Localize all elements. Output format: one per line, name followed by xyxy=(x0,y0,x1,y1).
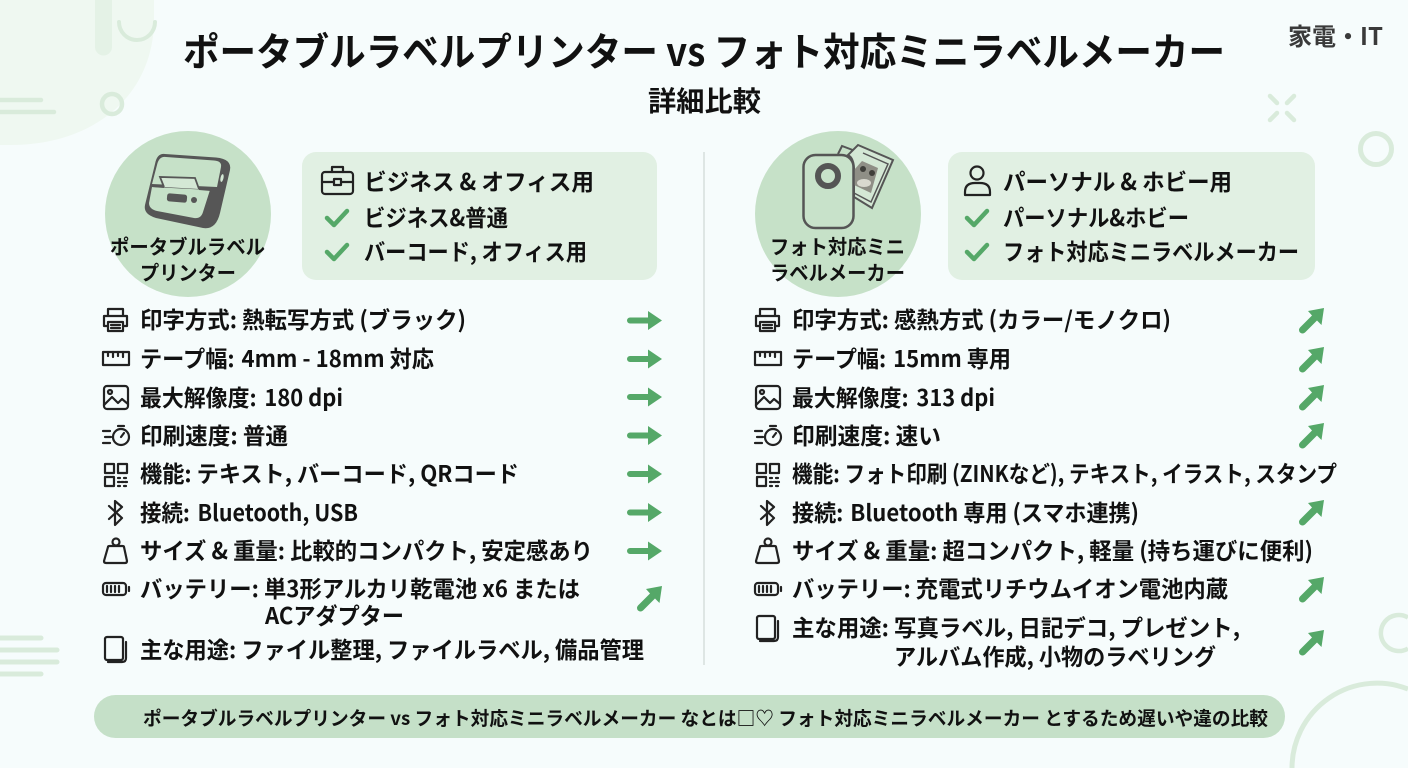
check item: パーソナル&ホビー xyxy=(1003,199,1189,233)
row: main uses: 主な用途: 写真ラベル, 日記デコ, プレゼント, xyxy=(792,609,1240,643)
row: connectivity: 接続: Bluetooth, USB xyxy=(140,494,358,528)
footer banner xyxy=(94,695,1285,738)
row: print method: 印字方式: 感熱方式 (カラー/モノクロ) xyxy=(792,301,1171,335)
row: print method: 印字方式: 熱転写方式 (ブラック) xyxy=(140,301,466,335)
icon: photo label maker xyxy=(804,145,893,228)
product badge: portable label printer xyxy=(105,131,271,297)
product badge: photo mini label maker xyxy=(755,131,921,297)
category tag: 家電・IT xyxy=(1288,17,1383,52)
arrows: right column ratings xyxy=(1299,308,1324,656)
row: main uses: 主な用途: ファイル整理, ファイルラベル, 備品管理 xyxy=(140,631,644,665)
use-case card: personal: パーソナル & ホビー用 xyxy=(1003,163,1232,197)
check item: バーコード, オフィス用 xyxy=(364,233,587,267)
icon: label printer xyxy=(145,154,230,228)
icon: briefcase xyxy=(322,167,353,194)
row: battery: バッテリー: 単3形アルカリ乾電池 x6 または xyxy=(140,570,580,604)
badge label xyxy=(770,231,905,286)
use-case card: business xyxy=(302,152,657,280)
row: battery: ACアダプター xyxy=(264,597,404,631)
row: connectivity: 接続: Bluetooth 専用 (スマホ連携) xyxy=(792,494,1139,528)
row: resolution: 最大解像度: 313 dpi xyxy=(792,379,995,413)
row: resolution: 最大解像度: 180 dpi xyxy=(140,379,343,413)
row: tape width: テープ幅: 4mm - 18mm 対応 xyxy=(140,340,434,374)
row: size and weight: サイズ & 重量: 比較的コンパクト, 安定感あり xyxy=(140,532,593,566)
check item: フォト対応ミニラベルメーカー xyxy=(1003,233,1299,267)
row: size and weight: サイズ & 重量: 超コンパクト, 軽量 (持ち運びに便利) xyxy=(792,532,1313,566)
row: battery: バッテリー: 充電式リチウムイオン電池内蔵 xyxy=(792,570,1228,604)
check item: ビジネス&普通 xyxy=(364,199,508,233)
row: tape width: テープ幅: 15mm 専用 xyxy=(792,340,1011,374)
badge label: ラベルメーカー xyxy=(770,257,905,286)
icon: person xyxy=(965,166,990,195)
panel: photo mini label maker xyxy=(755,131,1337,672)
panel: portable label printer xyxy=(103,131,662,665)
spec list: photo mini label maker xyxy=(755,301,1337,672)
arrows: left column ratings xyxy=(627,311,662,612)
row: battery xyxy=(103,570,580,631)
row: main uses xyxy=(757,609,1240,672)
row: features: 機能: フォト印刷 (ZINKなど), テキスト, イラスト, スタンプ xyxy=(792,455,1337,489)
badge label: フォト対応ミニ xyxy=(770,231,905,260)
row: print speed: 印刷速度: 普通 xyxy=(140,417,288,451)
use-case card: business: ビジネス & オフィス用 xyxy=(364,163,594,197)
row: print speed: 印刷速度: 速い xyxy=(792,417,941,451)
use-case card: personal xyxy=(948,152,1315,280)
badge label: プリンター xyxy=(140,257,236,286)
row: features: 機能: テキスト, バーコード, QRコード xyxy=(140,455,519,489)
row: main uses: アルバム作成, 小物のラベリング xyxy=(894,638,1216,672)
badge label xyxy=(110,231,265,286)
footer banner: ポータブルラベルプリンター vs フォト対応ミニラベルメーカー なとは□♡ フォト対応ミニラベルメーカー とするため遅いや違の比較 xyxy=(143,704,1268,731)
badge label: ポータブルラベル xyxy=(110,231,265,260)
subtitle: 詳細比較 xyxy=(648,80,761,120)
spec list: portable label printer xyxy=(103,301,644,665)
title: ポータブルラベルプリンター vs フォト対応ミニラベルメーカー xyxy=(183,22,1225,78)
